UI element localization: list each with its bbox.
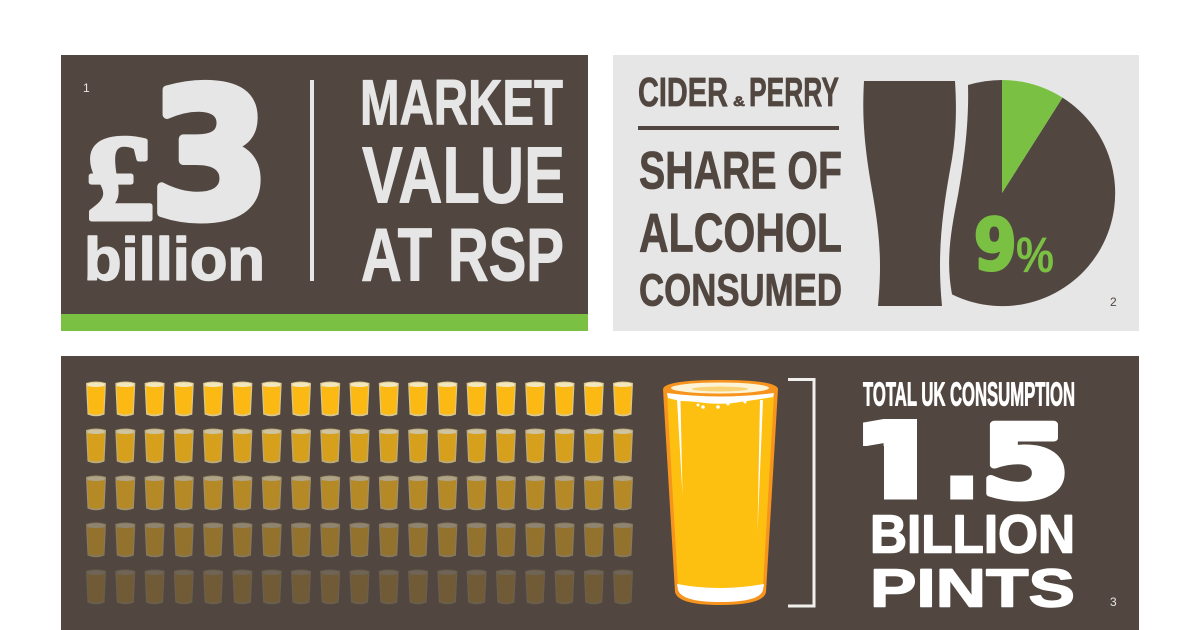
glasses row 1 (86, 382, 633, 416)
billion pints: PINTS (870, 558, 1075, 618)
pie value 9%: % (1016, 227, 1054, 283)
footnote 3: 3 (1110, 595, 1117, 609)
pie value 9%: 9 (974, 204, 1017, 286)
market value label: VALUE (362, 130, 565, 220)
big number 1.5: 1 (856, 403, 940, 521)
market value label: MARKET (360, 66, 563, 138)
icon: large pint glass (663, 380, 778, 605)
billion pints: BILLION (870, 504, 1075, 564)
panel: market value (61, 52, 588, 331)
billion: billion (84, 226, 265, 293)
glasses row 2 (86, 428, 633, 463)
heading: cider and perry: PERRY (749, 69, 839, 115)
glasses row 4 (86, 522, 633, 557)
green bar (61, 314, 588, 331)
footnote 1: 1 (83, 81, 90, 95)
pie value 9% (974, 204, 1054, 286)
heading rule (638, 126, 839, 130)
icon: glass silhouette (863, 81, 956, 306)
pie chart (949, 80, 1115, 306)
heading: cider and perry (638, 69, 839, 115)
panel: share of alcohol (613, 55, 1139, 331)
divider (310, 80, 314, 281)
pound sign: £ (86, 111, 154, 246)
big number 1.5: 5 (981, 406, 1069, 520)
big number 3: 3 (150, 52, 270, 258)
glasses row 5 (86, 570, 633, 604)
footnote 2: 2 (1110, 295, 1117, 309)
big number 1.5 (863, 419, 1065, 502)
big number 1.5: . (942, 403, 981, 521)
panel: total consumption (61, 356, 1139, 630)
billion pints (870, 504, 1075, 618)
market value label (360, 66, 565, 296)
market value label: AT RSP (361, 212, 564, 296)
share of alcohol consumed label: SHARE OF (639, 142, 842, 200)
glasses row 3 (86, 476, 633, 510)
share of alcohol consumed label: ALCOHOL (639, 202, 842, 264)
heading: cider and perry: & (733, 93, 745, 109)
small pint glasses grid (86, 382, 633, 604)
bracket (788, 380, 814, 606)
heading: cider and perry: CIDER (638, 69, 728, 115)
share of alcohol consumed label (639, 142, 842, 316)
share of alcohol consumed label: CONSUMED (639, 264, 842, 316)
